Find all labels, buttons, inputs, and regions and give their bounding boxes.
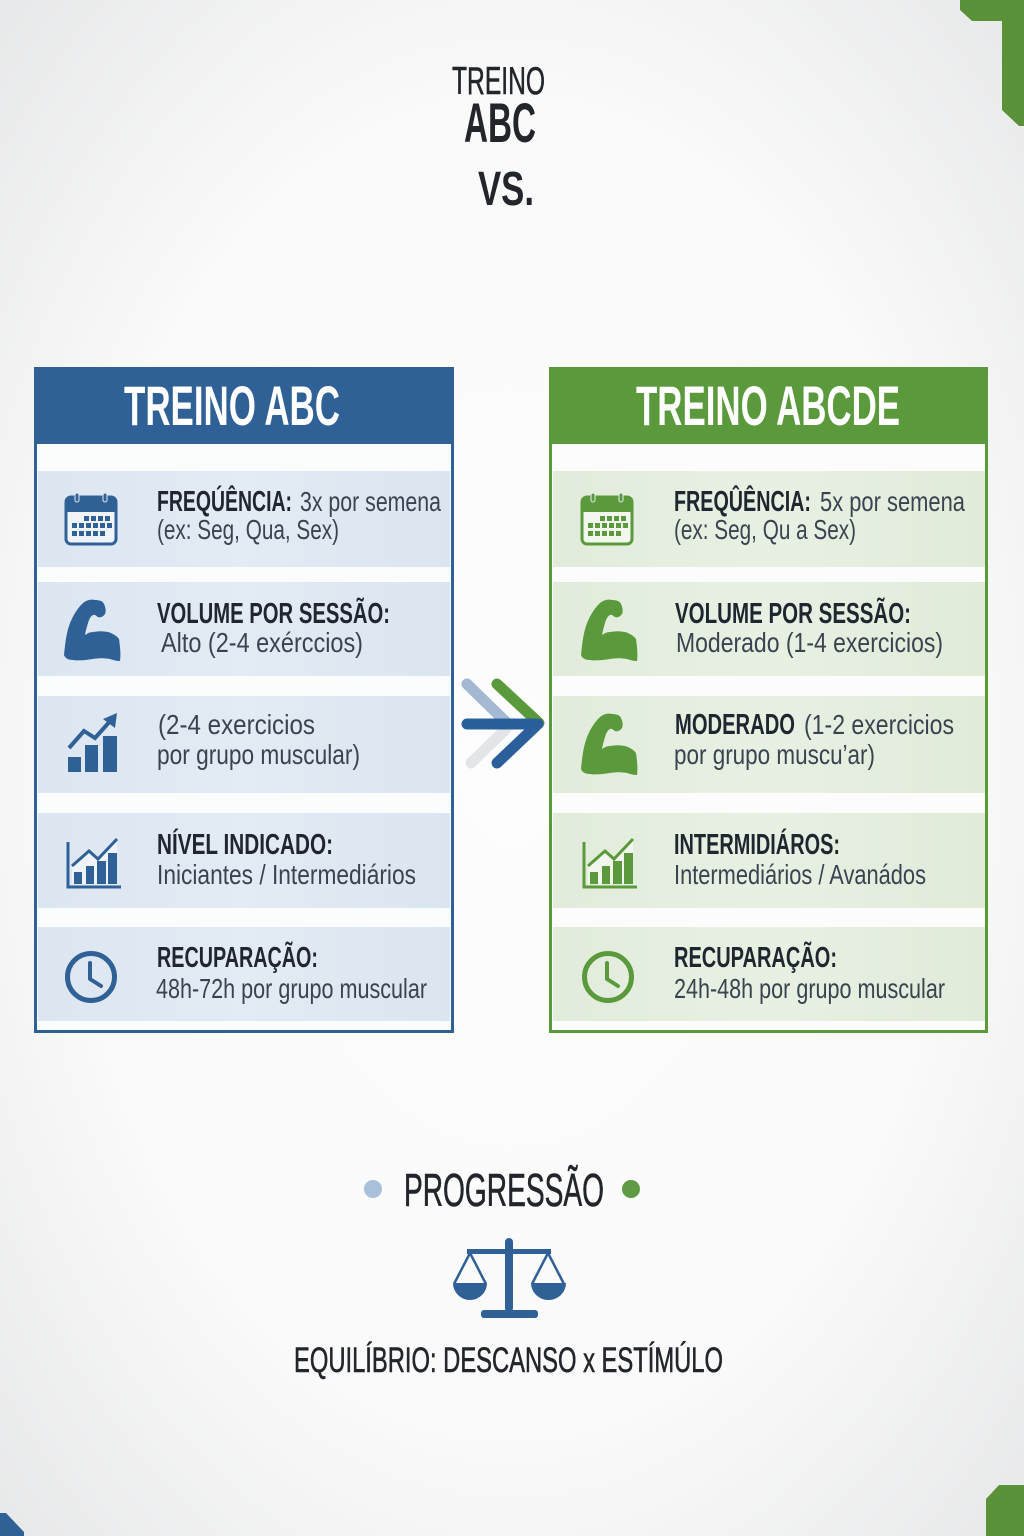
progression heading: PROGRESSÃO [404, 1164, 604, 1216]
panel header: Treino ABCDE [549, 367, 988, 444]
arrow [467, 684, 539, 763]
row: frequência: 5x por semena [820, 486, 966, 517]
row: nível indicado: Intermediários / Avanádos [674, 859, 926, 890]
row: recuperação: RECUPARAÇÃO: [674, 940, 837, 974]
row: recuperação: 24h-48h por grupo muscular [674, 973, 945, 1004]
row: nível indicado: Iniciantes / Intermediários [157, 859, 416, 890]
row: volume por sessão [553, 582, 985, 676]
corner accent: bottom right [986, 1485, 1024, 1536]
row: moderado: (1-2 exercicios [804, 709, 954, 740]
row: recuperação [38, 927, 450, 1021]
panel: Treino ABC [34, 367, 454, 1032]
row: volume por sessão: VOLUME POR SESSÃO: [675, 596, 911, 630]
row: moderado: por grupo muscu’ar) [674, 739, 875, 770]
title: ABC [464, 91, 536, 154]
row: frequência: (ex: Seg, Qua, Sex) [157, 514, 339, 545]
panel: Treino ABCDE [549, 367, 988, 1032]
row: nível indicado: NÍVEL INDICADO: [157, 827, 333, 861]
row: recuperação [553, 927, 985, 1021]
title [452, 60, 545, 216]
row: frequência: (ex: Seg, Qu a Sex) [674, 514, 856, 545]
panel header: Treino ABC [34, 367, 454, 444]
row: frequência: FREQÚÊNCIA: [157, 484, 292, 518]
title: TREINO [452, 60, 545, 103]
row: volume por sessão [38, 582, 450, 676]
row: volume por sessão: Alto (2-4 exérccios) [161, 627, 363, 658]
icon: balance scale [453, 1238, 566, 1318]
balance caption: EQUILÍBRIO: DESCANSO x ESTÍMÚLO [294, 1341, 723, 1380]
row: frequência: 3x por semena [300, 486, 442, 517]
row: recuperação: RECUPARAÇÃO: [157, 940, 318, 974]
progression heading [364, 1164, 640, 1216]
corner accent: top right [960, 0, 1024, 126]
row: nível indicado [553, 813, 985, 908]
icon: rising bars [68, 713, 117, 772]
row: frequência [38, 471, 450, 567]
row: frequência [553, 471, 985, 567]
row: exercícios por grupo: por grupo muscular) [157, 739, 360, 770]
row: volume por sessão: VOLUME POR SESSÃO: [157, 596, 390, 630]
row: nível indicado: INTERMIDIÁROS: [674, 827, 840, 861]
title: VS. [478, 163, 534, 216]
row: recuperação: 48h-72h por grupo muscular [156, 973, 427, 1004]
row: exercícios por grupo: (2-4 exercicios [158, 709, 315, 740]
row: moderado [553, 696, 985, 793]
row: moderado: MODERADO [675, 709, 795, 741]
row: volume por sessão: Moderado (1-4 exercicios) [676, 627, 943, 658]
corner accent: bottom left [0, 1513, 24, 1536]
row: exercícios por grupo [38, 696, 450, 793]
row: nível indicado [38, 813, 450, 908]
row: frequência: FREQÛÊNCIA: [674, 484, 811, 518]
panel header: Treino ABC: TREINO ABC [124, 374, 340, 437]
